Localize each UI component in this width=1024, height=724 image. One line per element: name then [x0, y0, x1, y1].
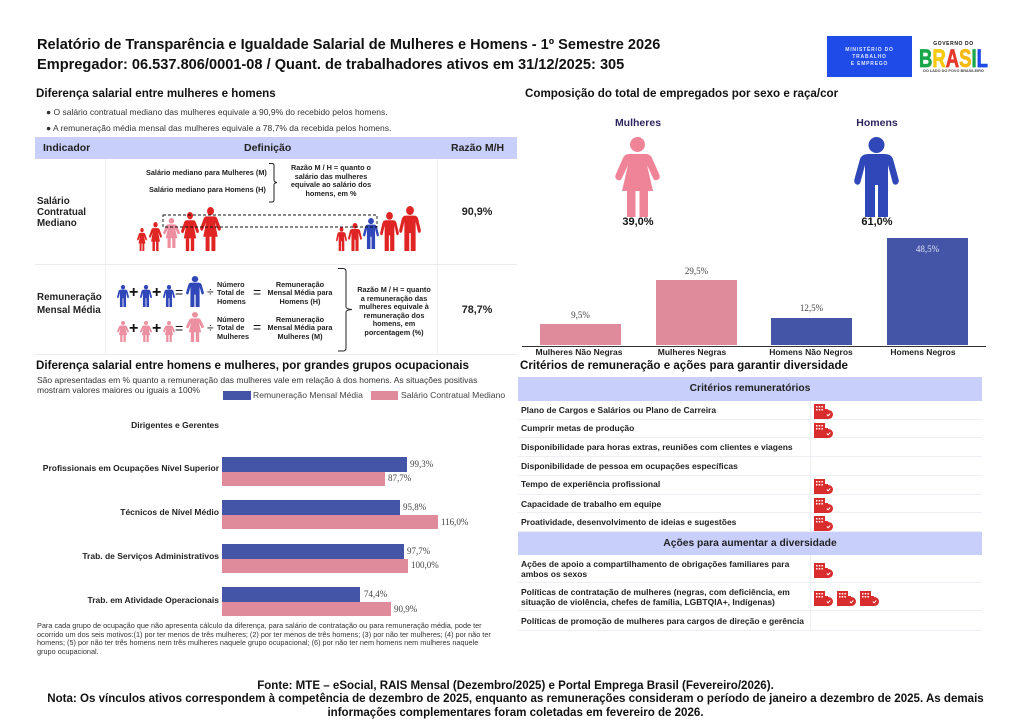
- row label: remuneração: [37, 292, 102, 316]
- footnote: [37, 621, 491, 656]
- mean ratio note: a remuneração das: [361, 294, 427, 302]
- panel: criteria table: Políticas de promoção de mulheres para cargos de direção e gerência: [521, 616, 804, 626]
- panel: criteria table: Disponibilidade para horas extras, reuniões com clientes e viagens: [521, 442, 793, 452]
- title: Relatório de Transparência e Igualdade Salarial de Mulheres e Homens - 1º Semestre 2026: [37, 37, 660, 53]
- value 78,7%: 78,7%: [462, 304, 492, 316]
- mean formula men: =: [253, 284, 261, 300]
- value 39,0%: 39,0%: [622, 216, 654, 228]
- mean formula women: Total de: [217, 323, 244, 332]
- panel: criteria table: ambos os sexos: [521, 568, 587, 578]
- header: ações: Ações para aumentar a diversidade: [663, 538, 837, 549]
- bar chart: occupational groups: [43, 420, 468, 616]
- table header: [35, 137, 517, 159]
- icon: woman: [615, 137, 660, 217]
- median ratio note: [291, 163, 371, 198]
- mean formula men: =: [175, 284, 183, 300]
- label: mulheres: Mulheres: [615, 117, 661, 129]
- bar chart: composition: 29,5%: [685, 266, 708, 276]
- bar chart: occupational groups: 74,4%: [364, 589, 387, 599]
- bar chart: composition: [522, 238, 986, 357]
- panel: criteria table: Proatividade, desenvolvimento de ideias e sugestões: [521, 517, 736, 527]
- bar chart: occupational groups: 95,8%: [403, 502, 426, 512]
- mean ratio note: homens, em: [373, 319, 415, 328]
- mean formula men: Homens (H): [280, 297, 320, 306]
- bar chart: occupational groups: 116,0%: [441, 517, 468, 527]
- mean formula women: Número: [217, 315, 245, 324]
- mean formula women: Mensal Média para: [268, 323, 332, 332]
- bar chart: occupational groups: 87,7%: [388, 473, 411, 483]
- bar chart: composition: 48,5%: [916, 244, 939, 254]
- subtitle: mostram valores maiores ou iguais a 100%: [37, 384, 200, 394]
- mean formula women: +: [129, 320, 138, 337]
- legend: Salário Contratual Mediano: [401, 390, 505, 400]
- subtitle: [37, 375, 478, 394]
- bullet text: ● O salário contratual mediano das mulheres equivale a 90,9% do recebido pelos homens.: [46, 107, 388, 117]
- source note: [47, 680, 984, 719]
- mean ratio note: mulheres equivale à: [359, 302, 429, 311]
- bullet text: [46, 107, 391, 132]
- header: critérios remuneratórios: [518, 377, 982, 401]
- legend: Remuneração Mensal Média: [253, 390, 363, 400]
- row label: salário: [37, 196, 86, 229]
- panel: criteria table: Políticas de contratação de mulheres (negras, com deficiência, em: [521, 587, 790, 597]
- row label: remuneração: Mensal Média: [37, 305, 101, 316]
- footnote: ocorrido um dos seis motivos:(1) por ter menos de três mulheres; (2) por ter menos de três homens; (3) por não ter mulheres; (4) por não ter: [37, 630, 491, 639]
- bracket: [338, 268, 352, 352]
- bullet text: ● A remuneração média mensal das mulheres equivale a 78,7% da recebida pelos homens.: [46, 122, 391, 132]
- mean formula women: Mulheres (M): [278, 332, 322, 341]
- mean formula women: Mulheres: [217, 332, 249, 341]
- icon: man: [854, 137, 899, 217]
- mean ratio note: porcentagem (%): [364, 328, 424, 336]
- mean ratio note: remuneração dos: [364, 310, 424, 320]
- mean formula men: Número: [217, 280, 245, 289]
- logo: ministério: TRABALHO: [852, 54, 887, 60]
- bar chart: occupational groups: Dirigentes e Gerentes: [131, 420, 219, 430]
- table header: Indicador: [43, 142, 90, 154]
- table header: Definição: [244, 142, 291, 154]
- bar chart: composition: 9,5%: [571, 310, 590, 320]
- icons: company check marks: [814, 404, 879, 606]
- source note: Nota: Os vínculos ativos correspondem à competência de dezembro de 2025, enquanto as remunerações consideram o período de janeiro a dezembro de 2025. As demais: [47, 693, 984, 705]
- row label: salário: Contratual: [37, 207, 86, 218]
- panel: criteria table: Capacidade de trabalho em equipe: [521, 498, 661, 508]
- median ratio note: equivale ao salário dos: [291, 180, 371, 189]
- median definition labels: [146, 163, 278, 202]
- mean ratio note: Razão M / H = quanto: [357, 285, 431, 294]
- heading: diferença por grupos: Diferença salarial entre homens e mulheres, por grandes grupos ocupacionais: [36, 359, 469, 372]
- bar chart: composition: 12,5%: [800, 303, 823, 313]
- panel: criteria table: Ações de apoio a compartilhamento de obrigações familiares para: [521, 559, 789, 569]
- panel: criteria table: Disponibilidade de pessoa em ocupações específicas: [521, 461, 738, 471]
- mean formula women: =: [175, 320, 183, 336]
- mean formula men: [117, 276, 332, 307]
- heading: critérios: Critérios de remuneração e ações para garantir diversidade: [520, 359, 848, 372]
- mean formula men: +: [152, 284, 161, 301]
- panel: criteria table: Plano de Cargos e Salários ou Plano de Carreira: [521, 405, 716, 415]
- median ratio note: salário das mulheres: [295, 172, 367, 180]
- mean formula women: +: [152, 320, 161, 337]
- table header: Razão M/H: [451, 142, 504, 154]
- panel: criteria table: Cumprir metas de produção: [521, 423, 634, 433]
- mean formula women: [117, 312, 332, 342]
- label: homens: Homens: [856, 117, 898, 129]
- footnote: grupo ocupacional.: [37, 647, 99, 656]
- title: [37, 37, 660, 72]
- median ratio note: homens, em %: [305, 188, 357, 198]
- bar chart: composition: Mulheres Não Negras: [536, 347, 622, 357]
- logo: governo do brasil: [912, 36, 995, 77]
- header: ações: [518, 532, 982, 555]
- value 61,0%: 61,0%: [861, 216, 893, 228]
- bar chart: occupational groups: 100,0%: [411, 560, 439, 570]
- footnote: Para cada grupo de ocupação que não apresenta cálculo da diferença, para salário de contratação ou para remuneração média, pode ter: [37, 621, 482, 630]
- source note: informações complementares foram coletadas em fevereiro de 2026.: [327, 707, 704, 719]
- subtitle: São apresentadas em % quanto a remuneração das mulheres vale em relação à dos homens. As situações positivas: [37, 375, 477, 385]
- women group: [137, 207, 221, 251]
- median definition labels: Salário mediano para Mulheres (M): [146, 168, 267, 177]
- median people illustration: [137, 206, 421, 251]
- mean ratio note: [357, 285, 431, 336]
- header: critérios remuneratórios: Critérios remuneratórios: [690, 383, 810, 394]
- mean formula men: ÷: [207, 285, 214, 299]
- mean formula men: Mensal Média para: [268, 288, 332, 297]
- title: Empregador: 06.537.806/0001-08 / Quant. de trabalhadores ativos em 31/12/2025: 305: [37, 56, 624, 72]
- bar chart: composition: Homens Negros: [890, 347, 956, 357]
- mean formula men: Remuneração: [276, 280, 324, 289]
- bar chart: composition: Homens Não Negros: [769, 347, 853, 357]
- logo: governo do brasil: BRASIL: [919, 45, 988, 73]
- mean formula men: Homens: [217, 297, 246, 306]
- median ratio note: Razão M / H = quanto o: [291, 163, 371, 172]
- panel: indicator table: [35, 137, 517, 355]
- mean formula women: Remuneração: [276, 315, 324, 324]
- logo: governo do brasil: GOVERNO DO: [933, 41, 974, 47]
- row label: remuneração: Remuneração: [37, 292, 102, 303]
- mean formula men: +: [129, 284, 138, 301]
- logo: ministério: E EMPREGO: [851, 61, 888, 67]
- panel: criteria table: Tempo de experiência profissional: [521, 478, 660, 488]
- mean formula women: ÷: [207, 321, 214, 335]
- logo: ministério: MINISTÉRIO DO: [845, 47, 894, 53]
- heading: composição: Composição do total de empregados por sexo e raça/cor: [525, 87, 838, 100]
- bar chart: occupational groups: Trab. de Serviços Administrativos: [82, 551, 219, 561]
- source note: Fonte: MTE – eSocial, RAIS Mensal (Dezembro/2025) e Portal Emprega Brasil (Fevereiro/2026).: [257, 680, 774, 692]
- row label: salário: Salário: [37, 196, 70, 207]
- row label: salário: Mediano: [37, 218, 77, 229]
- bar chart: occupational groups: 90,9%: [394, 604, 417, 614]
- legend: [223, 390, 505, 400]
- men group: [336, 206, 421, 251]
- panel: criteria table: situação de violência, chefes de família, LGBTQIA+, Indígenas): [521, 596, 775, 606]
- bar chart: occupational groups: Técnicos de Nível Médio: [120, 507, 219, 517]
- median definition labels: Salário mediano para Homens (H): [149, 185, 266, 194]
- value 90,9%: 90,9%: [462, 206, 492, 218]
- mean formula men: Total de: [217, 288, 244, 297]
- bar chart: occupational groups: 97,7%: [407, 546, 430, 556]
- bar chart: occupational groups: 99,3%: [410, 459, 433, 469]
- logo: governo do brasil: DO LADO DO POVO BRASILEIRO: [923, 69, 984, 73]
- bar chart: composition: Mulheres Negras: [658, 347, 726, 357]
- bar chart: occupational groups: Profissionais em Ocupações Nível Superior: [43, 463, 219, 473]
- mean formula women: =: [253, 319, 261, 335]
- logo: ministério: [827, 36, 912, 77]
- heading: diferença salarial: Diferença salarial entre mulheres e homens: [36, 87, 276, 100]
- bar chart: occupational groups: Trab. em Atividade Operacionais: [88, 595, 219, 605]
- footnote: homens; (5) por não ter três homens nem três mulheres naquele grupo ocupacional; (6) por não ter nem homens nem mulheres naquele: [37, 638, 478, 647]
